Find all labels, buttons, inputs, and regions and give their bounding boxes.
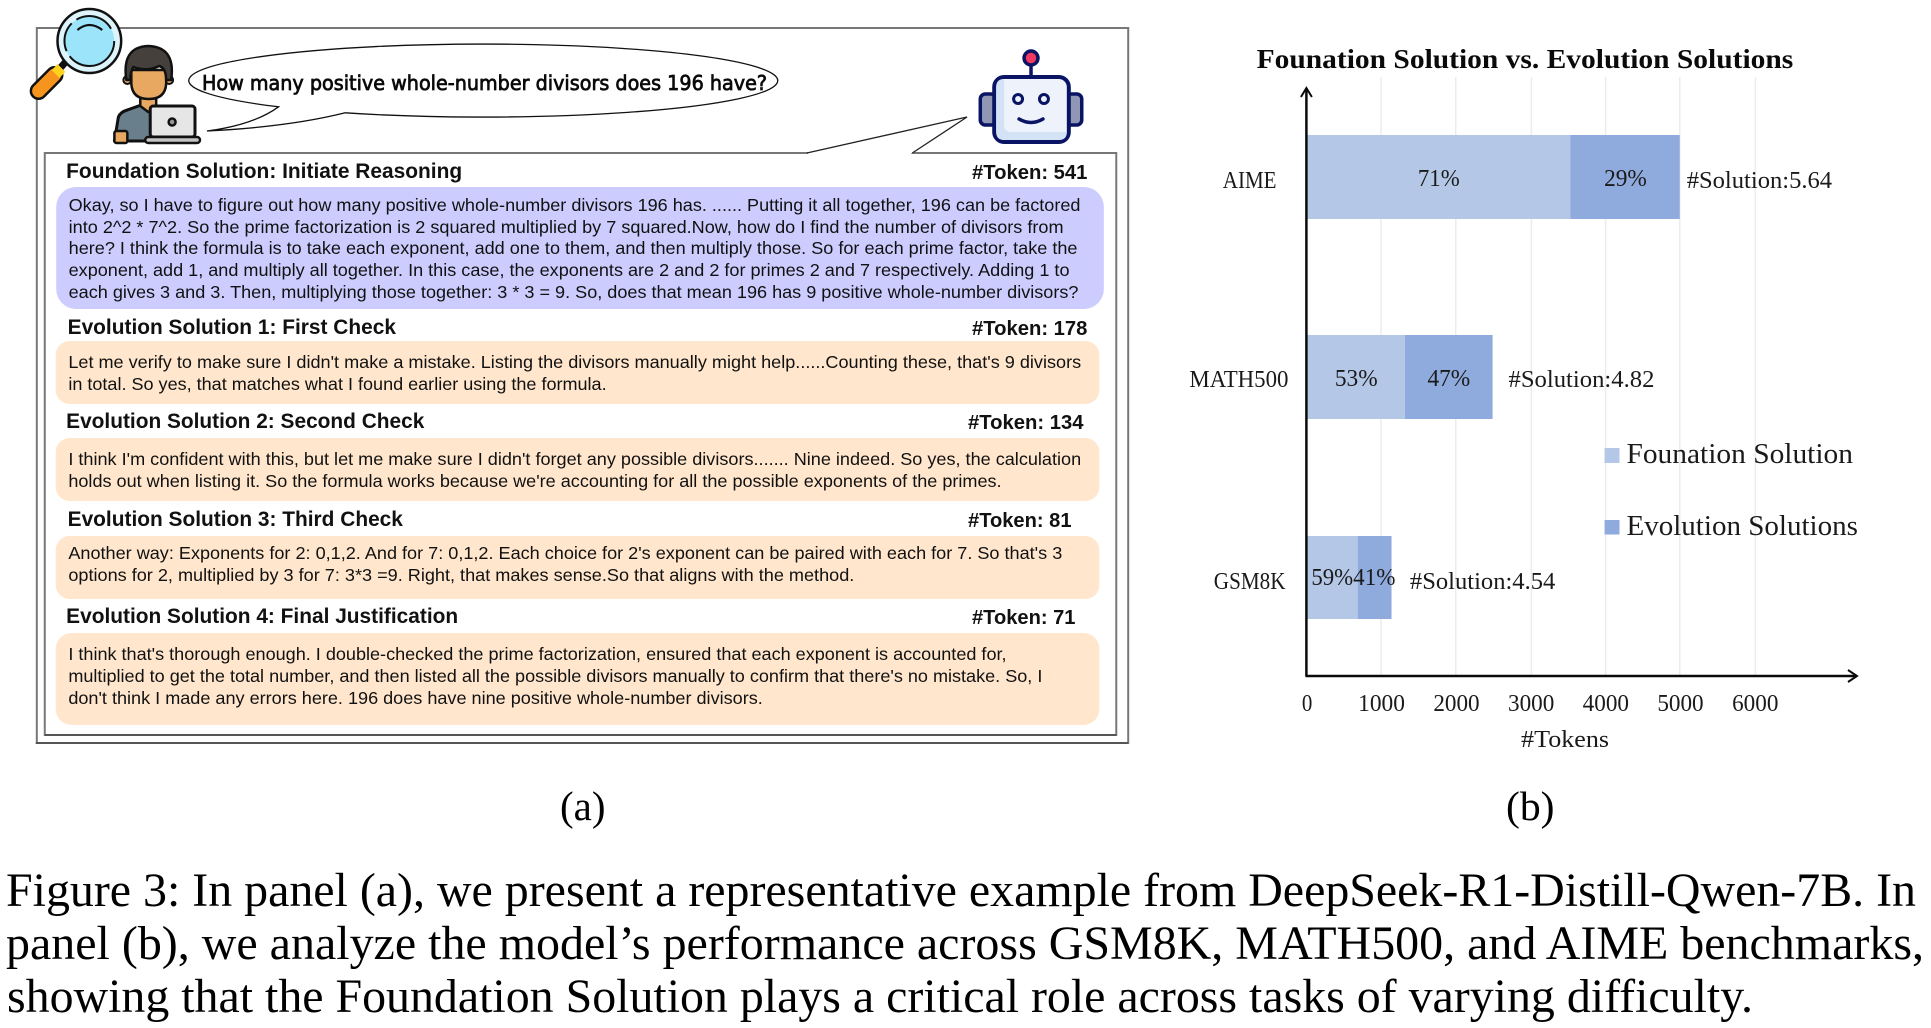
foundation text: exponent, add 1, and multiply all together. In this case, the exponents are 2 and 2 for primes 2 and 7 respectively. Adding 1 to — [69, 260, 1070, 280]
second check text: I think I'm confident with this, but let me make sure I didn't forget any possible divisors....... Nine indeed. So yes, the calculation — [68, 449, 1081, 469]
token count: 71: #Token: 71 — [972, 607, 1075, 629]
solution count annotations: #Solution:5.64 — [1687, 168, 1832, 194]
outer frame bottom edge — [36, 735, 1128, 743]
second check text: holds out when listing it. So the formula works because we're accounting for all the possible exponents of the primes. — [68, 471, 1002, 491]
inner frame — [45, 153, 1116, 735]
third check text: options for 2, multiplied by 3 for 7: 3*3 =9. Right, that makes sense.So that aligns with the method. — [68, 565, 854, 585]
x axis tick labels: 6000 — [1732, 691, 1778, 717]
bar: AIME: 71% — [1418, 166, 1460, 192]
bar: MATH500: 53% — [1335, 366, 1378, 392]
final justification text: multiplied to get the total number, and then listed all the possible divisors manually to confirm that there's no mistake. So, I — [68, 666, 1042, 686]
heading: final justification: Evolution Solution 4: Final Justification — [66, 605, 458, 628]
block: evolution solution 1 — [56, 316, 1099, 404]
x axis tick labels: 1000 — [1358, 691, 1405, 717]
category labels: AIME — [1223, 168, 1277, 194]
block: evolution solution 4 — [56, 605, 1099, 725]
solution count annotations: #Solution:4.82 — [1509, 367, 1654, 393]
robot speech tail — [807, 117, 967, 155]
bar: MATH500 — [1306, 335, 1493, 419]
axes with arrows — [1301, 88, 1857, 682]
legend — [1605, 439, 1858, 542]
foundation text — [69, 195, 1080, 302]
final justification text: I think that's thorough enough. I double-checked the prime factorization, ensured that each exponent is accounted for, — [68, 644, 1007, 664]
icon: robot — [980, 51, 1082, 142]
orange text box — [56, 341, 1099, 404]
heading: foundation solution: Foundation Solution: Initiate Reasoning — [66, 160, 462, 183]
category labels — [1189, 168, 1289, 595]
first check text: in total. So yes, that matches what I found earlier using the formula. — [68, 374, 607, 394]
orange text box — [56, 438, 1099, 501]
bar: GSM8K: 59% — [1311, 565, 1353, 591]
x axis title: #Tokens — [1521, 727, 1609, 753]
bar: AIME — [1306, 135, 1680, 219]
chart title: Founation Solution vs. Evolution Solutions — [1257, 44, 1793, 74]
figure caption: panel (b), we analyze the model’s performance across GSM8K, MATH500, and AIME benchmarks, — [6, 917, 1924, 970]
x axis tick labels: 4000 — [1583, 691, 1629, 717]
block: foundation solution — [56, 160, 1104, 309]
x axis tick labels — [1302, 691, 1778, 717]
bar: GSM8K: 41% — [1353, 565, 1396, 591]
block: evolution solution 2 — [56, 410, 1099, 501]
first check text — [68, 352, 1081, 394]
legend: Evolution Solutions — [1626, 511, 1858, 542]
speech bubble: question — [189, 44, 778, 131]
icon: person at laptop — [114, 46, 200, 143]
sublabel (a): (a) — [560, 783, 606, 829]
outer frame — [37, 28, 1128, 743]
solution count annotations — [1410, 168, 1832, 595]
block: evolution solution 3 — [56, 508, 1099, 599]
third check text: Another way: Exponents for 2: 0,1,2. And for 7: 0,1,2. Each choice for 2's exponent can be paired with each for 7. So that's 3 — [68, 543, 1062, 563]
figure caption: showing that the Foundation Solution plays a critical role across tasks of varying difficulty. — [7, 970, 1753, 1023]
category labels: MATH500 — [1189, 367, 1289, 393]
figure caption: Figure 3: In panel (a), we present a representative example from DeepSeek-R1-Distill-Qwen-7B. In — [6, 864, 1916, 917]
foundation text: Okay, so I have to figure out how many positive whole-number divisors 196 has. ...... Putting it all together, 196 can be factored — [69, 195, 1080, 215]
bar: MATH500: 47% — [1427, 366, 1470, 392]
sublabel (b): (b) — [1506, 783, 1554, 829]
panel (a): dialogue example — [36, 9, 1128, 743]
legend: Founation Solution — [1626, 439, 1853, 470]
token count: 541: #Token: 541 — [972, 162, 1087, 184]
heading: first check: Evolution Solution 1: First Check — [68, 316, 396, 339]
category labels: GSM8K — [1214, 569, 1286, 595]
second check text — [68, 449, 1081, 491]
orange text box — [56, 633, 1099, 725]
token count: 178: #Token: 178 — [972, 318, 1087, 340]
token count: 81: #Token: 81 — [968, 510, 1072, 532]
panel (b): stacked bar chart — [1189, 44, 1858, 753]
final justification text: don't think I made any errors here. 196 does have nine positive whole-number divisors. — [68, 688, 763, 708]
foundation text: here? I think the formula is to take each exponent, add one to them, and then multiply those. So for each prime factor, take the — [69, 238, 1077, 258]
token count: 134: #Token: 134 — [968, 412, 1083, 434]
question text: How many positive whole-number divisors does 196 have? — [202, 71, 767, 95]
third check text — [68, 543, 1062, 585]
icon: magnifying glass — [39, 9, 121, 91]
x axis tick labels: 2000 — [1433, 691, 1480, 717]
purple text box — [56, 187, 1104, 309]
bar: AIME: 29% — [1604, 166, 1647, 192]
foundation text: into 2^2 * 7^2. So the prime factorization is 2 squared multiplied by 7 squared.Now, how do I find the number of divisors from — [69, 217, 1064, 237]
heading: third check: Evolution Solution 3: Third Check — [68, 508, 403, 531]
foundation text: each gives 3 and 3. Then, multiplying those together: 3 * 3 = 9. So, does that mean 196 has 9 positive whole-number divisors? — [69, 282, 1078, 302]
x axis tick labels: 5000 — [1657, 691, 1704, 717]
figure caption — [6, 864, 1924, 1023]
heading: second check: Evolution Solution 2: Second Check — [66, 410, 425, 433]
orange text box — [56, 536, 1099, 599]
x axis tick labels: 3000 — [1508, 691, 1554, 717]
solution count annotations: #Solution:4.54 — [1410, 569, 1555, 595]
bar: GSM8K — [1306, 536, 1396, 619]
first check text: Let me verify to make sure I didn't make a mistake. Listing the divisors manually might help......Counting these, that's 9 divisors — [68, 352, 1081, 372]
x axis tick labels: 0 — [1302, 691, 1312, 717]
final justification text — [68, 644, 1042, 708]
